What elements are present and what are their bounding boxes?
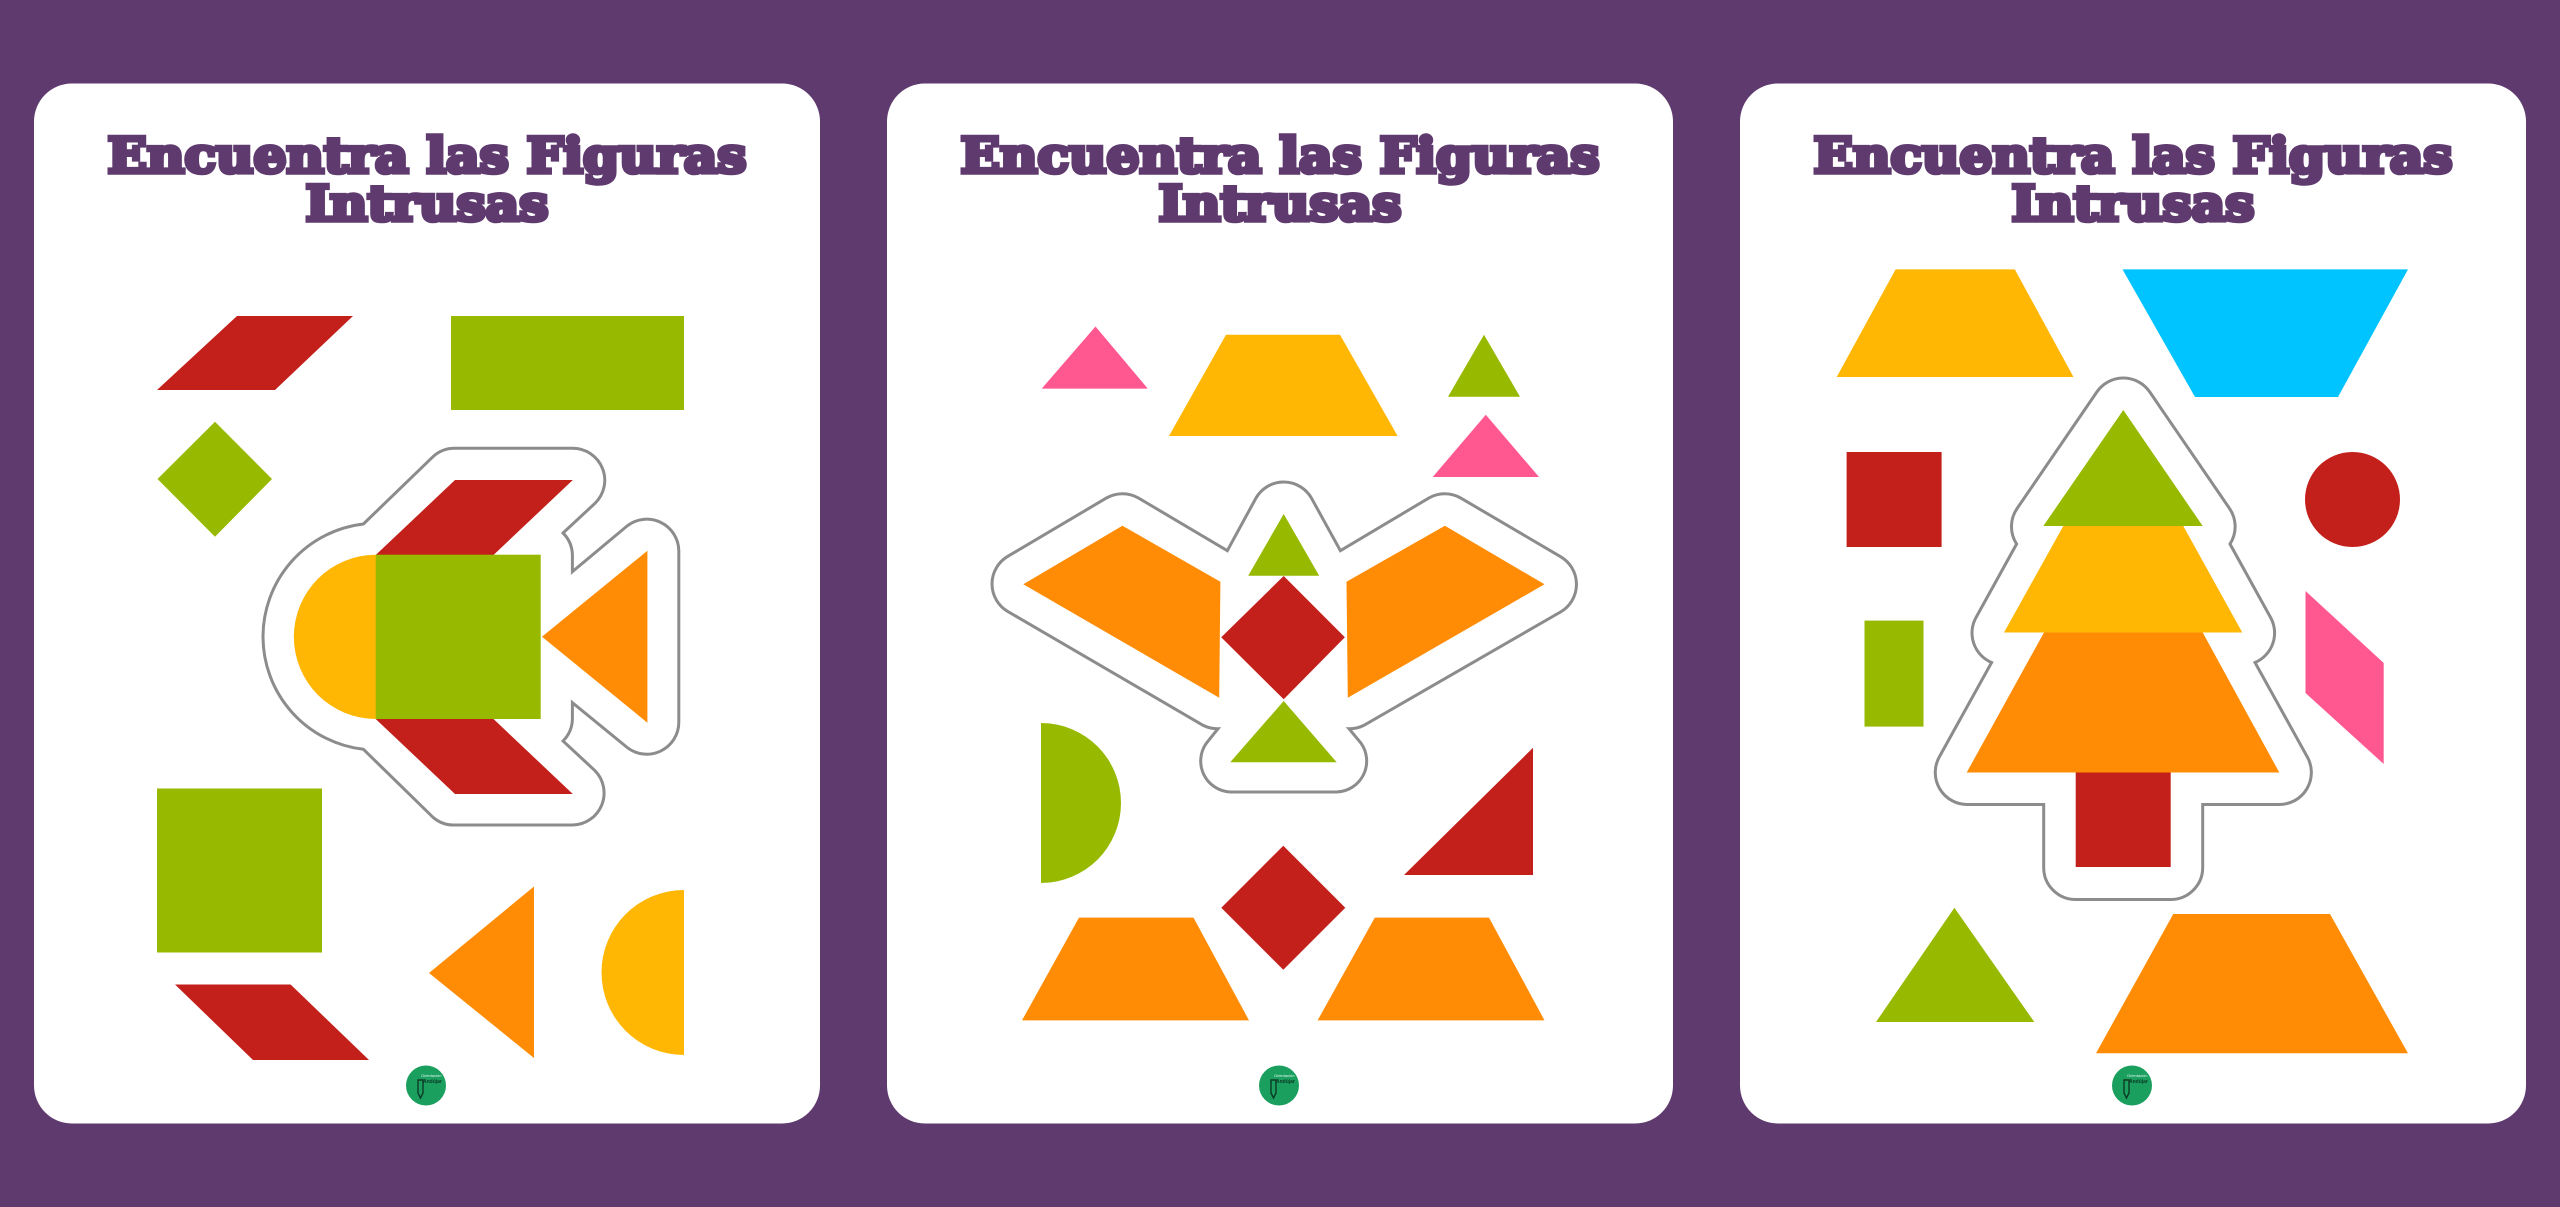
shape: orange triangle [429,886,534,1058]
title: worksheet 3: Intrusas [2012,174,2254,232]
shape: pink parallelogram [2306,591,2384,764]
shape: green rectangle [1864,621,1924,727]
left wing [1023,526,1220,698]
shape: green triangle [1876,908,2034,1022]
panel: worksheet 3, tree [1740,84,2526,1124]
logo: publisher badge [2112,1066,2152,1106]
shape: pink triangle left [1042,326,1148,389]
logo: publisher badge [1259,1066,1299,1106]
shape: red square [1847,452,1942,547]
figure: tree outline with pieces [1935,378,2311,900]
title: worksheet 2: Intrusas [1158,174,1402,232]
shape: yellow trapezoid [1837,269,2074,377]
figure: bird outline with pieces [992,482,1576,792]
shape: orange trapezoid left [1022,918,1249,1020]
shape: small green triangle [1448,335,1520,397]
fish top fin [376,480,573,555]
shape: orange trapezoid [2096,914,2408,1053]
shape: red right triangle [1404,748,1533,875]
logo: publisher badge: Andújar [2129,1079,2148,1085]
logo: publisher badge: Orientación [2127,1073,2147,1078]
shape: yellow half circle [602,890,684,1055]
logo: publisher badge [406,1066,446,1106]
bird head triangle [1248,514,1319,576]
figure: fish outline with pieces [263,448,679,825]
shape: red parallelogram bottom [175,984,369,1060]
bird tail triangle [1230,701,1337,762]
title: worksheet 3 [1814,126,2452,232]
shape: yellow trapezoid [1169,335,1398,436]
bird body diamond [1221,576,1345,699]
logo: publisher badge: Andújar [1276,1079,1295,1085]
title: worksheet 3: Encuentra las Figuras [1814,126,2452,184]
logo: publisher badge: Andújar [423,1079,442,1085]
shape: pink triangle right [1433,415,1539,477]
tree middle tier [2004,526,2242,632]
panel: worksheet 1, fish [34,84,820,1124]
shape: green rectangle [451,316,684,410]
fish head half circle [294,555,376,719]
shape: red parallelogram top left [157,316,353,390]
title: worksheet 2: Encuentra las Figuras [960,126,1600,184]
shape: blue trapezoid [2122,269,2408,397]
title: worksheet 1: Encuentra las Figuras [108,126,746,184]
shape: red diamond [1221,846,1345,970]
panel: worksheet 2, bird [887,84,1673,1124]
right wing [1346,526,1544,698]
fish body square [376,555,541,719]
title: worksheet 1 [108,126,746,232]
logo: publisher badge: Orientación [421,1073,441,1078]
tree bottom tier [1967,632,2279,772]
bird silhouette outline [992,482,1576,792]
shape: green diamond [158,422,272,537]
logo: publisher badge: Orientación [1274,1073,1294,1078]
fish silhouette outline [263,448,679,825]
tree trunk [2076,772,2171,867]
title: worksheet 2 [960,126,1600,232]
fish bottom fin [376,719,573,794]
shape: red circle [2305,452,2400,547]
shape: green square [157,788,322,952]
title: worksheet 1: Intrusas [306,174,548,232]
tree top triangle [2043,410,2203,526]
tree silhouette outline [1935,378,2311,900]
shape: orange trapezoid right [1318,918,1544,1020]
shape: green half circle [1041,723,1121,883]
fish tail triangle [542,551,647,723]
